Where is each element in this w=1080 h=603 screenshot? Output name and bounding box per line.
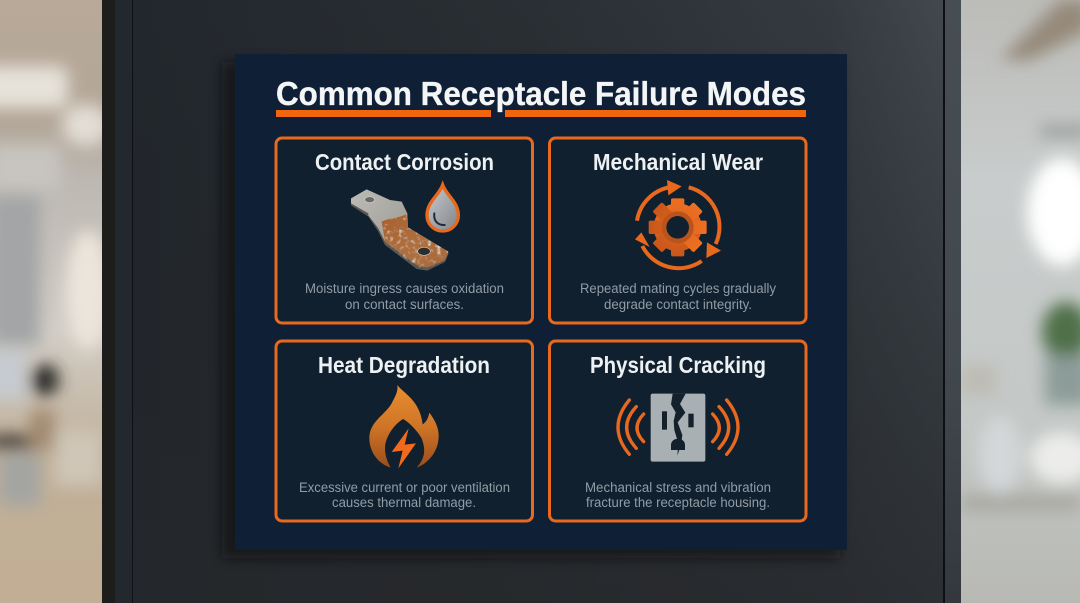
icon: water drop — [427, 185, 458, 231]
blurred office background: left — [0, 0, 110, 603]
heading: mechanical wear: Mechanical Wear — [593, 149, 763, 175]
panel: physical cracking — [550, 341, 806, 521]
description: physical cracking: Mechanical stress and vibration — [585, 480, 771, 495]
icon: cracked receptacle with vibration waves — [618, 394, 738, 462]
heading: heat degradation: Heat Degradation — [318, 352, 490, 378]
description: mechanical wear — [580, 281, 776, 312]
description: mechanical wear: degrade contact integrity. — [604, 297, 752, 312]
dark wall panel — [102, 0, 961, 603]
sign board — [222, 54, 847, 558]
description: contact corrosion: Moisture ingress causes oxidation — [305, 281, 504, 296]
icon: gear with cycle arrows — [635, 180, 721, 268]
description: heat degradation: Excessive current or poor ventilation — [299, 480, 510, 495]
blurred office background: right — [961, 0, 1080, 603]
heading: contact corrosion: Contact Corrosion — [315, 149, 494, 175]
panel: mechanical wear — [550, 138, 806, 323]
title underline — [276, 110, 806, 117]
description: physical cracking: fracture the receptacle housing. — [586, 495, 770, 510]
description: mechanical wear: Repeated mating cycles gradually — [580, 281, 776, 296]
description: heat degradation — [299, 480, 510, 510]
icon: corroded metal terminal — [351, 189, 452, 272]
panel: heat degradation — [276, 341, 532, 521]
title: Common Receptacle Failure Modes — [276, 75, 806, 112]
heading: physical cracking: Physical Cracking — [590, 352, 766, 378]
icon: flame with lightning bolt — [369, 385, 439, 468]
description: physical cracking — [585, 480, 771, 510]
description: heat degradation: causes thermal damage. — [332, 495, 476, 510]
panel: contact corrosion — [276, 138, 532, 323]
description: contact corrosion — [305, 281, 504, 312]
description: contact corrosion: on contact surfaces. — [345, 297, 464, 312]
